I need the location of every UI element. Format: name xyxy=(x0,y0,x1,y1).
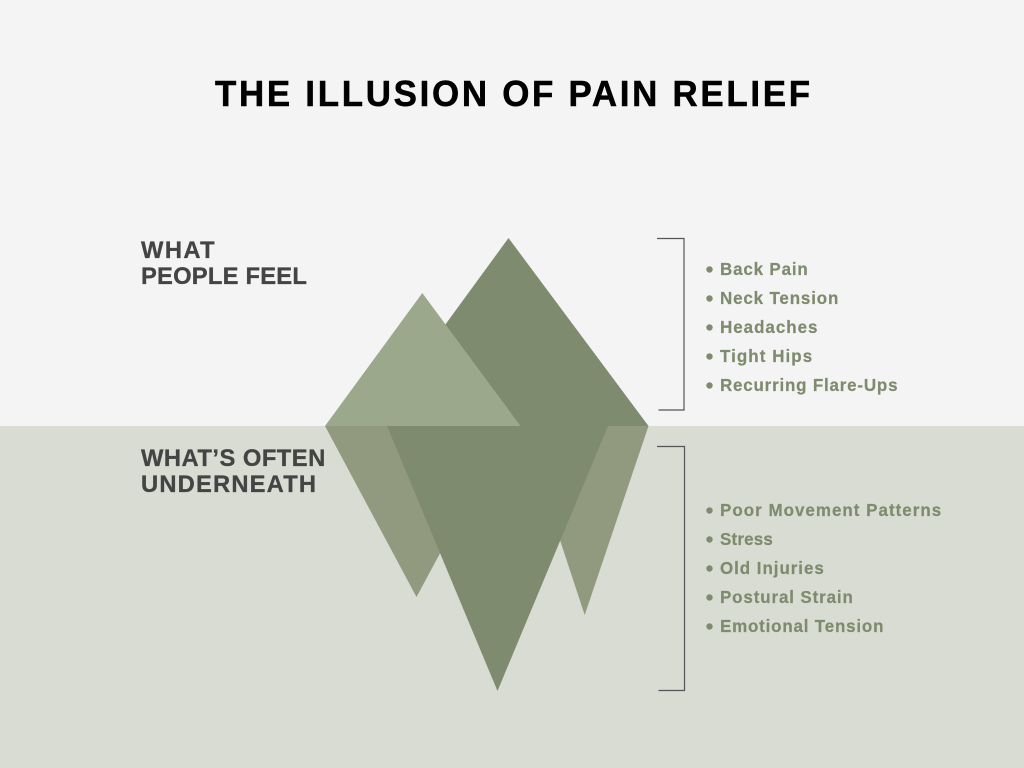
list item: postural strain: Postural Strain xyxy=(720,587,853,607)
list: what people feel xyxy=(706,259,898,395)
heading: what people feel: PEOPLE FEEL xyxy=(141,263,307,290)
list item: poor movement patterns: Poor Movement Patterns xyxy=(720,500,941,520)
list: what's often underneath xyxy=(706,500,941,636)
iceberg: left submerged shard xyxy=(325,426,445,597)
list item: recurring flare-ups: Recurring Flare-Ups xyxy=(720,375,898,395)
iceberg: main peak above water xyxy=(387,238,648,426)
panel: below the surface background xyxy=(0,426,1024,768)
list item: stress: Stress xyxy=(720,529,773,549)
heading: what's often underneath xyxy=(141,445,325,498)
title: THE ILLUSION OF PAIN RELIEF xyxy=(215,74,810,114)
heading: what's often underneath: UNDERNEATH xyxy=(141,471,316,498)
iceberg: right submerged shard xyxy=(555,426,648,615)
list item: back pain: Back Pain xyxy=(720,259,808,279)
panel: above the surface background xyxy=(0,0,1024,426)
list item: emotional tension: Emotional Tension xyxy=(720,616,883,636)
iceberg illustration xyxy=(325,238,648,691)
bracket: symptoms felt xyxy=(657,238,684,410)
heading: what people feel: WHAT xyxy=(141,237,215,264)
list item: neck tension: Neck Tension xyxy=(720,288,838,308)
heading: what's often underneath: WHAT’S OFTEN xyxy=(141,445,325,472)
list item: headaches: Headaches xyxy=(720,317,817,337)
heading: what people feel xyxy=(141,237,307,290)
list item: old injuries: Old Injuries xyxy=(720,558,824,578)
bracket: underlying causes xyxy=(657,446,684,690)
list item: tight hips: Tight Hips xyxy=(720,346,812,366)
iceberg: main mass below water xyxy=(387,426,608,691)
iceberg: small front peak xyxy=(325,293,520,426)
